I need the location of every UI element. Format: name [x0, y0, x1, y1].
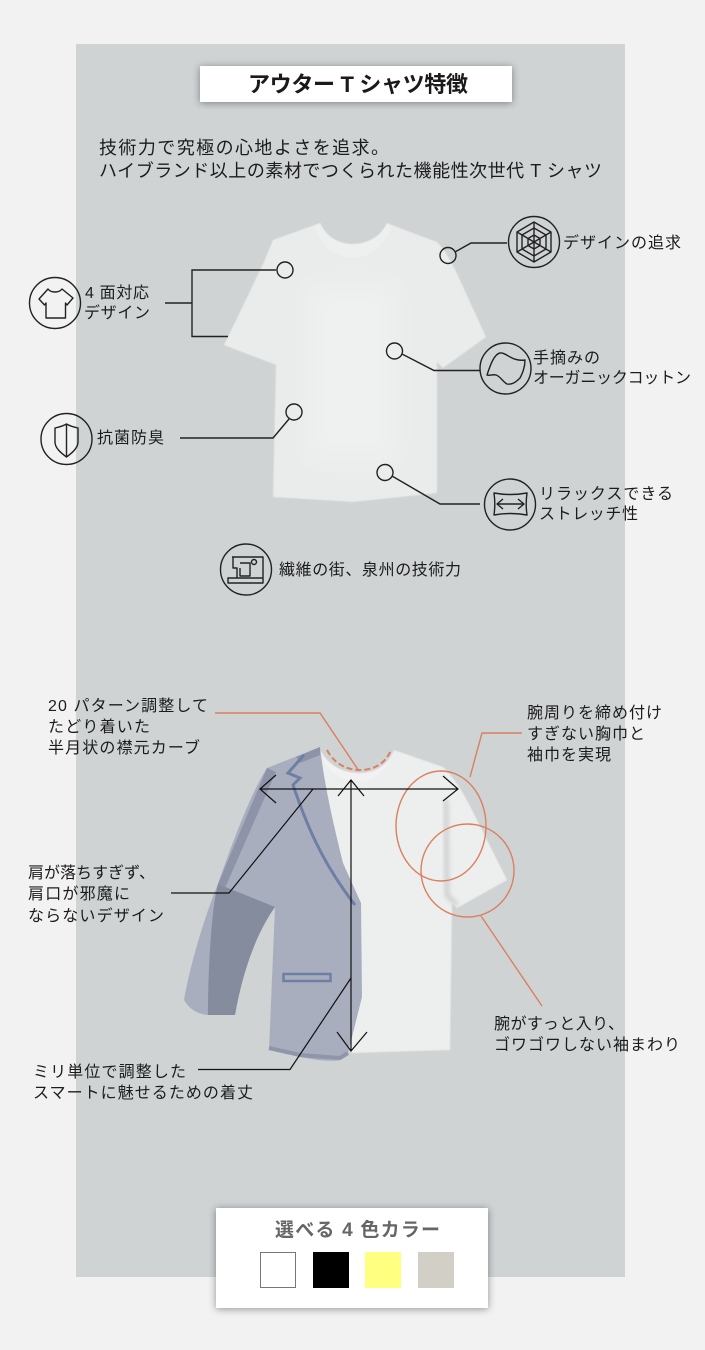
intro text: [99, 138, 602, 181]
label: four-way design: [84, 284, 150, 322]
connector: organic cotton: [386, 343, 480, 370]
label: antibacterial: 抗菌防臭: [97, 429, 164, 447]
swatch: beige: [418, 1252, 454, 1288]
swatch: black: [313, 1252, 349, 1288]
icon: t-shirt: [30, 278, 80, 328]
black callout: length: [198, 978, 351, 1070]
icon: sewing machine: [220, 544, 272, 595]
label: four-way design: デザイン: [84, 303, 150, 322]
label: chest and sleeve width: 袖巾を実現: [527, 746, 611, 764]
connector: antibacterial: [180, 404, 302, 438]
label: collar curve: 半月状の襟元カーブ: [48, 738, 200, 757]
title: アウター T シャツ特徴: [248, 72, 468, 97]
label: sleeve: [494, 1015, 680, 1054]
label: organic cotton: オーガニックコットン: [533, 369, 691, 387]
orange dashed collar curve: [327, 750, 391, 770]
label: chest and sleeve width: すぎない胸巾と: [527, 725, 645, 743]
white t-shirt illustration: [224, 223, 486, 502]
icon: shield: [41, 414, 92, 464]
label: length: [33, 1063, 253, 1102]
label: chest and sleeve width: [527, 704, 662, 764]
label: shoulder design: 肩口が邪魔に: [28, 885, 130, 903]
shoulder width arrow: [260, 775, 458, 803]
title: [200, 66, 512, 102]
label: stretch: リラックスできる: [539, 485, 673, 503]
label: chest and sleeve width: 腕周りを締め付け: [527, 704, 662, 722]
label: shoulder design: [28, 864, 164, 925]
label: collar curve: 20 パターン調整して: [48, 697, 208, 715]
orange callout: collar: [215, 713, 359, 771]
color heading: 選べる 4 色カラー: [275, 1219, 440, 1241]
length arrow: [337, 780, 367, 1051]
label: textile town: 繊維の街、泉州の技術力: [279, 561, 461, 579]
label: stretch: [539, 485, 673, 523]
color options panel: [216, 1208, 488, 1308]
jacket lapel and pocket: [284, 755, 355, 981]
label: design pursuit: デザインの追求: [563, 233, 681, 252]
swatch: yellow: [365, 1252, 401, 1288]
icon: stretch: [484, 479, 536, 530]
swatch: white: [260, 1252, 296, 1288]
label: sleeve: ゴワゴワしない袖まわり: [494, 1035, 680, 1054]
label: collar curve: たどり着いた: [48, 718, 150, 736]
intro text: 技術力で究極の心地よさを追求。: [99, 138, 389, 158]
label: four-way design: 4 面対応: [85, 284, 149, 302]
label: organic cotton: [533, 349, 691, 387]
black callout: shoulder: [171, 789, 313, 893]
label: shoulder design: ならないデザイン: [28, 906, 164, 925]
icon: web: [508, 216, 560, 268]
intro text: ハイブランド以上の素材でつくられた機能性次世代 T シャツ: [99, 160, 602, 181]
label: shoulder design: 肩が落ちすぎず、: [28, 864, 155, 882]
label: stretch: ストレッチ性: [539, 505, 638, 523]
background panel: [76, 44, 625, 1277]
connector: four-way design: [165, 262, 293, 336]
icon: cotton fabric: [480, 343, 531, 394]
label: collar curve: [48, 697, 208, 757]
connector: design pursuit: [440, 243, 507, 264]
orange callout: sleeve: [421, 824, 542, 1006]
jacket half of comparison: [184, 747, 362, 1061]
t-shirt half of comparison: [320, 750, 507, 1053]
label: length: スマートに魅せるための着丈: [33, 1084, 253, 1102]
connector: stretch: [377, 464, 480, 504]
label: sleeve: 腕がすっと入り、: [494, 1015, 624, 1033]
orange callout: chest width: [396, 733, 522, 881]
label: length: ミリ単位で調整した: [33, 1063, 186, 1081]
label: organic cotton: 手摘みの: [533, 349, 600, 367]
